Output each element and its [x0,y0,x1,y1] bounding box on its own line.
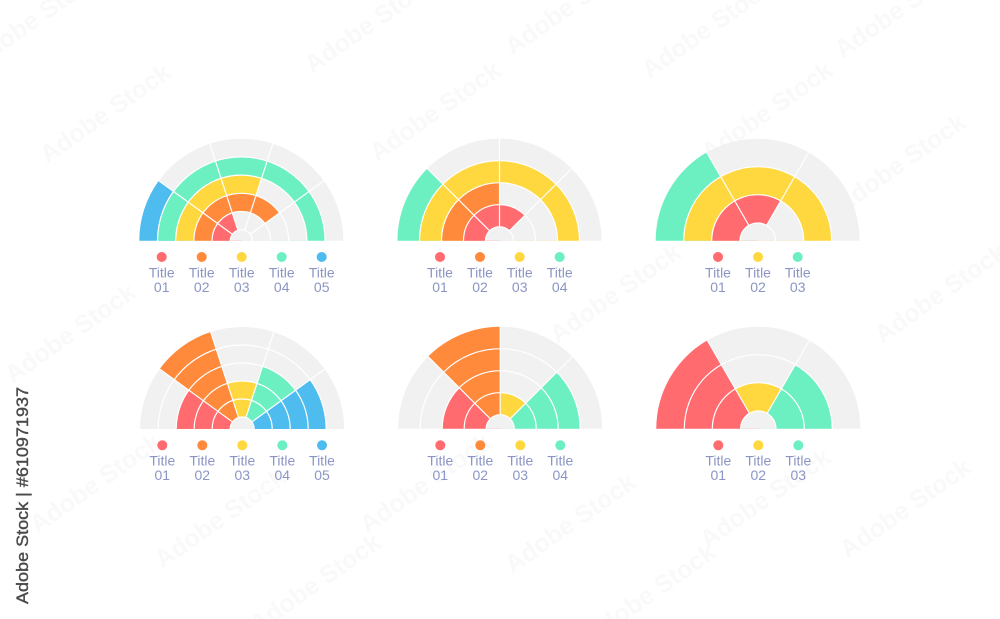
background watermarks: Adobe Stock [835,453,976,564]
legend chart 1: Title [229,264,255,280]
legend chart 4: 02 [195,467,210,483]
panel: chart 6 with three radial sectors [656,327,860,503]
background watermarks: Adobe Stock [365,56,506,167]
panel: chart 2 with four concentric arcs [398,138,602,321]
background watermarks: Adobe Stock [0,278,141,389]
legend chart 5: 02 [473,467,488,483]
background watermarks: Adobe Stock [545,238,686,349]
legend chart 2: 01 [432,279,448,295]
legend chart 6: Title [705,452,731,468]
legend chart 2: 04 [552,279,568,295]
legend chart 5: 03 [513,467,528,483]
legend chart 3: 01 [710,279,726,295]
legend chart 3 [705,252,811,295]
legend chart 3: 03 [790,279,806,295]
legend chart 3: 02 [750,279,766,295]
semicircle chart 4 [140,327,344,513]
vertical stock credit: Adobe Stock | #610971937 [13,387,32,604]
background watermarks: Adobe Stock [695,443,836,554]
legend chart 2: Title [507,264,533,280]
background watermarks: Adobe Stock [697,56,838,167]
legend chart 2: 02 [472,279,488,295]
background watermarks: Adobe Stock [830,108,971,219]
legend chart 4: Title [229,452,255,468]
semicircle chart 6 [656,327,860,503]
legend chart 3: Title [705,264,731,280]
legend chart 4: Title [149,452,175,468]
panel: chart 3 with three concentric arcs [656,139,860,315]
legend chart 3: Title [745,264,771,280]
legend chart 4: Title [189,452,215,468]
legend chart 6: Title [785,452,811,468]
legend chart 5: Title [427,452,453,468]
legend chart 1 [149,252,335,295]
legend chart 4 [149,440,335,483]
panel: chart 1 with five concentric arcs [139,139,343,324]
legend chart 4: 01 [155,467,170,483]
legend chart 5: Title [507,452,533,468]
legend chart 1: Title [189,264,215,280]
semicircle chart 2 [398,138,602,321]
legend chart 4: Title [309,452,335,468]
legend chart 1: 04 [274,279,290,295]
legend chart 1: 05 [314,279,330,295]
semicircle chart 5 [398,326,602,509]
semicircle chart 3 [656,139,860,315]
background watermarks: Adobe Stock [150,463,291,574]
legend chart 4: 05 [314,467,330,483]
legend chart 5: 01 [433,467,448,483]
background watermarks: Adobe Stock [35,58,176,169]
panel: chart 5 with four radial sectors [398,326,602,509]
legend chart 5 [427,440,573,483]
legend chart 2: Title [427,264,453,280]
legend chart 1: Title [149,264,175,280]
legend chart 5: Title [547,452,573,468]
legend chart 2: Title [547,264,573,280]
legend chart 3: Title [785,264,811,280]
legend chart 1: 02 [194,279,210,295]
legend chart 4: 04 [275,467,290,483]
semicircle chart 1 [139,139,343,324]
background watermarks: Adobe Stock [25,428,166,539]
legend chart 6: 01 [711,467,726,483]
legend chart 5: 04 [553,467,568,483]
legend chart 4: 03 [235,467,250,483]
legend chart 2: 03 [512,279,528,295]
panel: chart 4 with five radial sectors [140,327,344,513]
legend chart 4: Title [269,452,295,468]
background watermarks: Adobe Stock [355,428,496,539]
legend chart 1: 01 [154,279,170,295]
background watermarks: Adobe Stock [500,468,641,579]
legend chart 1: Title [269,264,295,280]
legend chart 1: 03 [234,279,250,295]
legend chart 6: 02 [751,467,766,483]
legend chart 6: 03 [791,467,806,483]
legend chart 2: Title [467,264,493,280]
legend chart 6: Title [745,452,771,468]
legend chart 1: Title [309,264,335,280]
legend chart 5: Title [467,452,493,468]
legend chart 2 [427,252,573,295]
legend chart 6 [705,440,811,483]
